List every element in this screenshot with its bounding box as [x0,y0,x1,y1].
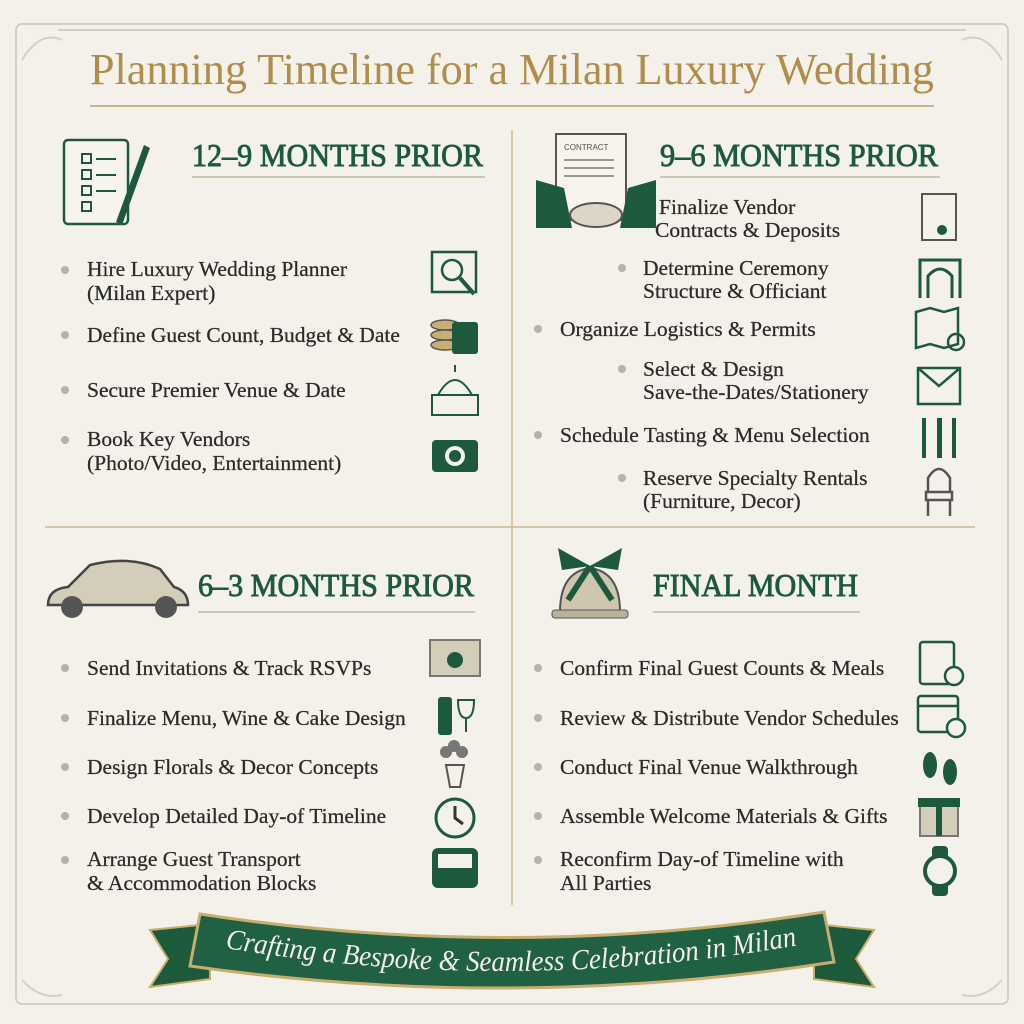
panel: 9-6 months: Save-the-Dates/Stationery [643,380,869,404]
panel: 9-6 months: Determine Ceremony [643,256,829,280]
icon: checklist scroll [64,140,150,225]
panel: 9-6 months [534,134,964,516]
icons [432,252,476,294]
panel: 9-6 months: (Furniture, Decor) [643,489,801,513]
panel: 6-3 months: Develop Detailed Day-of Timeline [87,804,386,828]
panel: 6-3 months [48,561,480,895]
icon: bell [552,548,628,618]
panel: 9-6 months: Finalize Vendor [659,195,795,219]
panel: 12-9 months: (Photo/Video, Entertainment) [87,451,341,475]
panel: 9-6 months: Reserve Specialty Rentals [643,466,868,490]
dividers [511,130,513,905]
panel: 6-3 months: Finalize Menu, Wine & Cake Design [87,706,406,730]
panel: 12-9 months: Hire Luxury Wedding Planner [87,257,347,281]
panel: 6-3 months: Arrange Guest Transport [87,847,301,871]
panel: final month: All Parties [560,871,651,895]
panel: 9-6 months: Structure & Officiant [643,279,827,303]
panel: 12-9 months: Define Guest Count, Budget & Date [87,323,400,347]
panel: 9-6 months: Organize Logistics & Permits [560,317,816,341]
banner: Crafting a Bespoke & Seamless Celebration in Milan [228,930,796,974]
title: Planning Timeline for a Milan Luxury Wedding [90,45,934,94]
panel: 6-3 months: Send Invitations & Track RSVPs [87,656,371,680]
panel: final month [534,548,965,896]
panel: 6-3 months: Design Florals & Decor Concepts [87,755,378,779]
icon: vintage car [48,561,188,618]
heading: 9–6 MONTHS PRIOR [660,137,939,173]
panel: 12-9 months: Secure Premier Venue & Date [87,378,346,402]
heading: 6–3 MONTHS PRIOR [198,567,475,603]
heading: FINAL MONTH [653,567,858,603]
icon: contract handshake [536,134,656,228]
panel: final month: Assemble Welcome Materials & Gifts [560,804,887,828]
panel: 6-3 months: & Accommodation Blocks [87,871,316,895]
panel: 12-9 months: (Milan Expert) [87,281,215,305]
panel: final month: Confirm Final Guest Counts & Meals [560,656,884,680]
heading: 12–9 MONTHS PRIOR [192,137,484,173]
panel: 9-6 months: Contracts & Deposits [655,218,840,242]
panel: 9-6 months: Schedule Tasting & Menu Selection [560,423,870,447]
icon: contract handshake: CONTRACT [564,143,609,152]
panel: final month: Review & Distribute Vendor Schedules [560,706,899,730]
panel: final month: Reconfirm Day-of Timeline with [560,847,844,871]
banner [148,910,876,990]
panel: 9-6 months: Select & Design [643,357,784,381]
panel: 12-9 months [61,137,485,475]
panel: 12-9 months: Book Key Vendors [87,427,250,451]
panel: final month: Conduct Final Venue Walkthrough [560,755,858,779]
